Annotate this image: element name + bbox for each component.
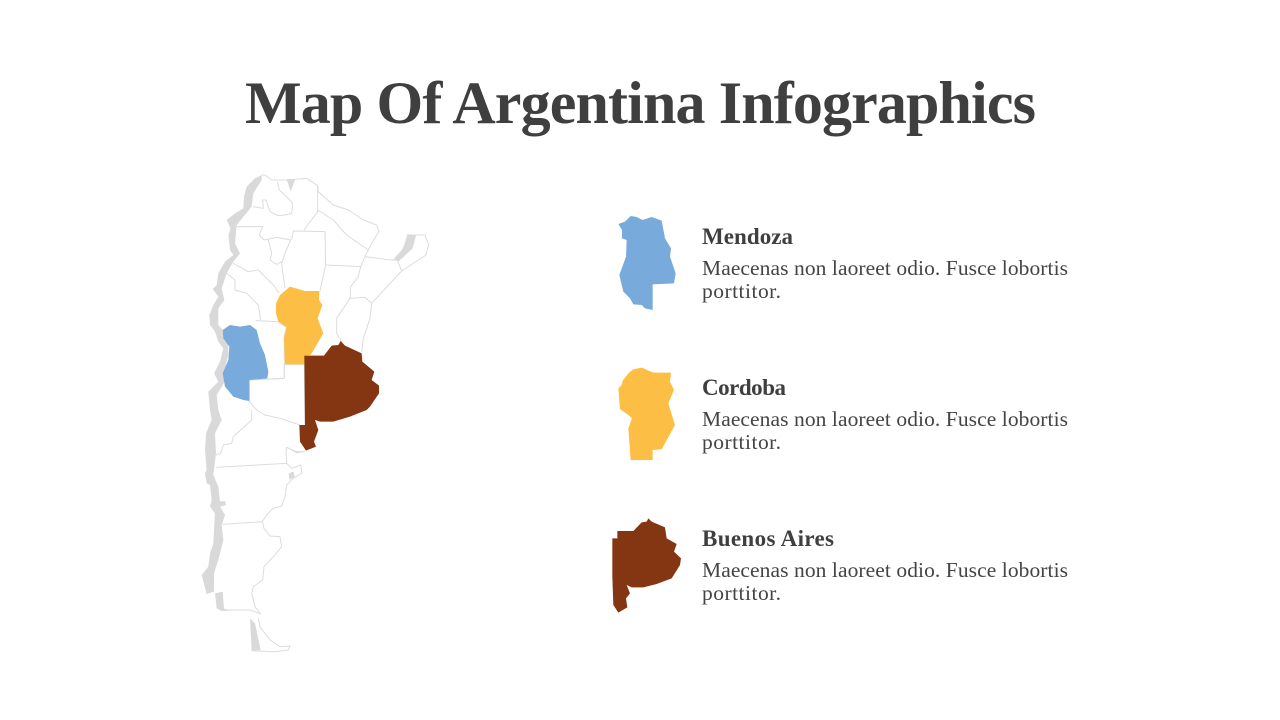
text: Buenos Aires description: Maecenas non laoreet odio. Fusce lobortis	[702, 558, 1068, 582]
legend item: Buenos Aires	[612, 518, 1068, 613]
text: Cordoba description: Maecenas non laoreet odio. Fusce lobortis	[702, 407, 1068, 431]
map region: Buenos Aires	[299, 341, 379, 451]
Andes shading	[202, 175, 416, 651]
heading: Buenos Aires: Buenos Aires	[702, 526, 834, 551]
icon: Mendoza shape	[618, 216, 676, 310]
legend item: Cordoba	[618, 368, 1068, 460]
icon: Buenos Aires shape	[612, 518, 681, 613]
text: Mendoza description: porttitor.	[702, 279, 781, 303]
text: Mendoza description: Maecenas non laoreet odio. Fusce lobortis	[702, 256, 1068, 280]
map of Argentina	[202, 175, 429, 652]
icon: Cordoba shape	[618, 368, 675, 460]
map region: Mendoza	[223, 325, 268, 401]
text: Cordoba description: porttitor.	[702, 430, 781, 454]
text: Buenos Aires description: porttitor.	[702, 581, 781, 605]
heading: Cordoba: Cordoba	[702, 375, 786, 400]
heading: Mendoza: Mendoza	[702, 224, 794, 249]
map region: Cordoba	[276, 287, 323, 364]
legend item: Mendoza	[618, 216, 1068, 310]
title: Map Of Argentina Infographics	[245, 70, 1036, 136]
province borders	[216, 175, 429, 652]
